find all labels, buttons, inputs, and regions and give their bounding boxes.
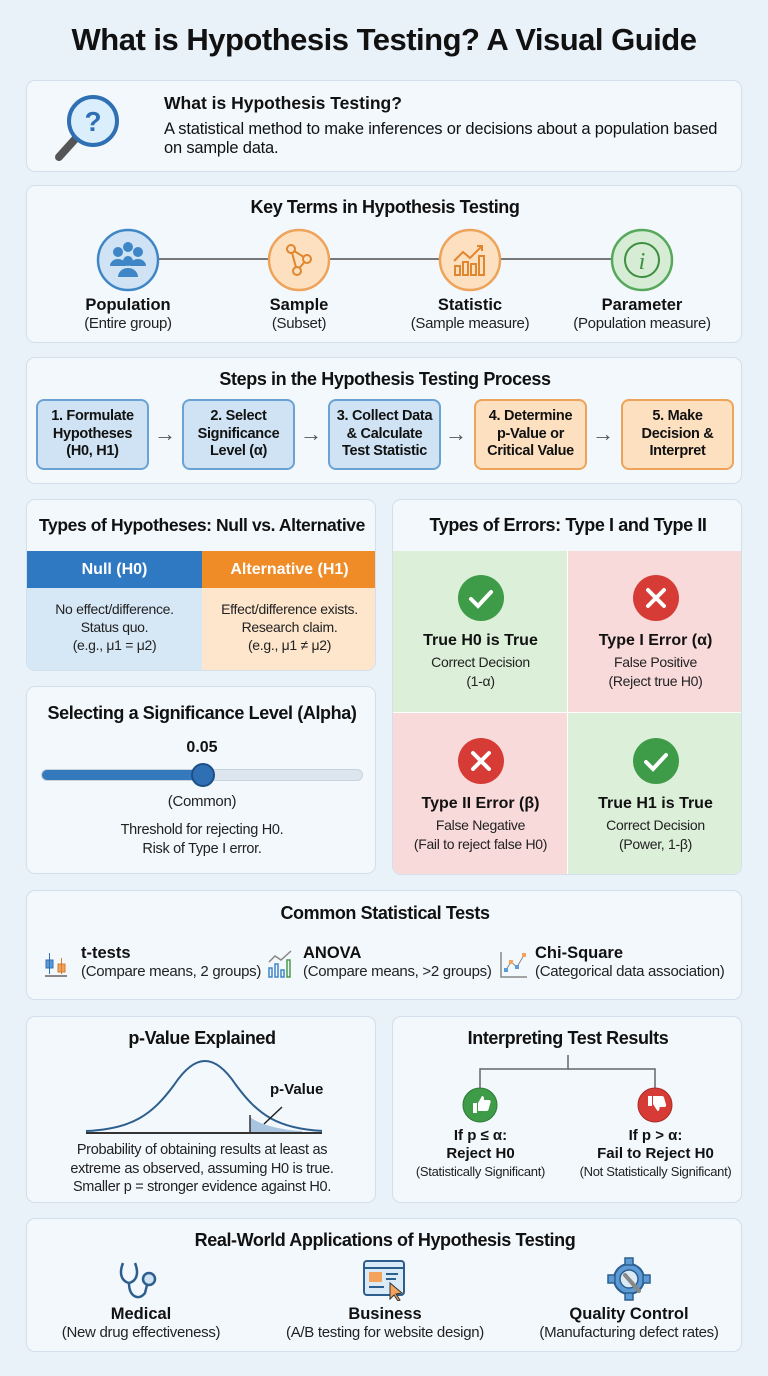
result: reject: Reject H0 [446,1145,515,1162]
cell: type I: Type I Error (α) [599,632,712,649]
icon: parameter: i [639,249,645,275]
label: population: Population [85,296,171,314]
icon: stethoscope [120,1262,156,1298]
step 2: 2. Select [210,408,267,424]
item: ANOVA [268,944,492,980]
result: reject: (Statistically Significant) [416,1164,545,1179]
cell: true H1 [568,713,743,876]
step 1: (H0, H1) [66,443,119,459]
step 4: p-Value or [497,426,564,442]
icon: magnifier: ? [84,106,102,137]
value label: 0.05 [186,739,218,756]
panel: hypotheses types [26,499,376,671]
label: medical: Medical [111,1305,171,1323]
icon: population [96,228,160,292]
panel: common tests [26,890,742,1000]
column: alternative: (e.g., μ1 ≠ μ2) [248,637,331,653]
column: null [27,551,202,672]
column: null: (e.g., μ1 = μ2) [73,637,156,653]
text: p-value explanation [70,1142,334,1195]
step 1: 1. Formulate [51,408,134,424]
chart: bell curve [86,1060,322,1134]
cell: type I [568,551,743,713]
step 3: 3. Collect Data [337,408,432,424]
label: population [84,296,172,332]
icon: sample [268,228,330,292]
step 4: 4. Determine [489,408,572,424]
heading: interpreting: Interpreting Test Results [468,1028,668,1048]
result: fail to reject: Fail to Reject H0 [597,1145,714,1162]
panel: key terms [26,185,742,343]
label: business: Business [348,1305,422,1323]
heading: key terms: Key Terms in Hypothesis Testing [250,197,520,217]
label: parameter: Parameter [602,296,682,314]
result: fail to reject: (Not Statistically Significant) [580,1164,731,1179]
connector line [127,258,642,260]
label: sample [270,296,328,332]
heading: alpha: Selecting a Significance Level (Alpha) [48,703,356,723]
column: alternative [202,551,377,672]
text: p-value explanation: Smaller p = stronger evidence against H0. [73,1179,331,1195]
description [120,822,283,857]
label: parameter [573,296,711,332]
step 2 [182,399,295,470]
cell: true H0: Correct Decision [431,654,530,670]
icon: thumbs up [462,1088,498,1122]
step 1: Hypotheses [53,426,132,442]
step 4 [474,399,587,470]
step 3: & Calculate [347,426,422,442]
item: t-tests [45,944,261,980]
heading: steps: Steps in the Hypothesis Testing Process [219,369,551,389]
cell: true H1: True H1 is True [598,795,713,812]
arrow 3: → [445,421,467,446]
label: sample: Sample [270,296,328,314]
text: p-value explanation: extreme as observed, assuming H0 is true. [70,1160,334,1176]
item: t-tests: (Compare means, 2 groups) [81,963,261,980]
item: t-tests: t-tests [81,944,131,962]
column: alternative: Effect/difference exists. [221,601,358,617]
panel: interpreting results [392,1016,742,1203]
label: medical: (New drug effectiveness) [62,1324,220,1341]
icon: parameter [610,228,674,292]
label: statistic: (Sample measure) [411,315,529,332]
column: alternative: Research claim. [242,619,337,635]
cell: true H1: Correct Decision [606,817,705,833]
item: ANOVA: (Compare means, >2 groups) [303,963,492,980]
column: null: Status quo. [81,619,148,635]
panel: significance level [26,686,376,874]
column: alternative: Alternative (H1) [230,561,349,578]
label: business: (A/B testing for website design) [286,1324,484,1341]
step 2: Level (α) [210,443,267,459]
icon: web page [363,1260,405,1301]
icon: gear wrench [607,1257,651,1301]
caption: (Common) [168,793,236,810]
description: Threshold for rejecting H0. [121,822,283,838]
label: business [286,1305,484,1341]
heading: hypotheses: Types of Hypotheses: Null vs. Alternative [39,515,365,535]
description: Risk of Type I error. [142,841,262,857]
panel: definition [26,80,742,172]
label: sample: (Subset) [272,315,326,332]
decision tree lines [479,1055,656,1088]
arrow 1: → [154,421,176,446]
panel: applications [26,1218,742,1352]
step 5: Interpret [649,443,706,459]
label: quality control: (Manufacturing defect rates) [539,1324,719,1341]
cell: true H0: (1-α) [466,673,495,689]
arrow 4: → [592,421,614,446]
panel: steps [26,357,742,484]
heading: tests: Common Statistical Tests [280,903,490,923]
item: Chi-Square: (Categorical data association) [535,963,724,980]
step 5 [621,399,734,470]
title: What is Hypothesis Testing? A Visual Guide [72,22,696,57]
step 3 [328,399,441,470]
heading: applications: Real-World Applications of Hypothesis Testing [195,1230,575,1250]
arrow 2: → [300,421,322,446]
cell: type II: Type II Error (β) [422,795,539,812]
cell: true H0 [393,551,568,713]
heading: definition: What is Hypothesis Testing? [164,93,402,113]
result: reject: If p ≤ α: [454,1127,507,1144]
cell: type I: (Reject true H0) [608,673,702,689]
panel: errors [392,499,742,875]
cell: true H0: True H0 is True [423,632,538,649]
result: fail to reject: If p > α: [629,1127,682,1144]
label: parameter: (Population measure) [573,315,711,332]
slider [41,769,363,781]
label: statistic: Statistic [438,296,502,314]
label: population: (Entire group) [84,315,172,332]
label: p-value: p-Value [270,1081,323,1098]
label: quality control [539,1305,719,1341]
item: ANOVA: ANOVA [303,944,361,962]
step 3: Test Statistic [342,443,427,459]
step 1 [36,399,149,470]
panel: p-value [26,1016,376,1203]
text: p-value explanation: Probability of obtaining results at least as [77,1142,327,1158]
cell: type II: False Negative [436,817,525,833]
step 4: Critical Value [487,443,574,459]
item: Chi-Square [500,944,724,980]
step 5: Decision & [642,426,713,442]
column: null: No effect/difference. [55,601,174,617]
label: medical [62,1305,220,1341]
label: quality control: Quality Control [569,1305,689,1323]
result: reject [416,1127,545,1179]
text: definition: A statistical method to make inferences or decisions about a population based on sample data. [164,120,717,157]
cell: type II [393,713,568,876]
icon: statistic [438,228,502,292]
step 2: Significance [198,426,279,442]
step 5: 5. Make [652,408,703,424]
label: statistic [411,296,529,332]
icon: magnifier [55,95,119,161]
heading: errors: Types of Errors: Type I and Type II [429,515,707,535]
heading: p-value: p-Value Explained [128,1028,276,1048]
result: fail to reject [580,1127,731,1179]
icon: thumbs down [638,1088,672,1122]
cell: type I: False Positive [614,654,697,670]
cell: type II: (Fail to reject false H0) [414,836,547,852]
cell: true H1: (Power, 1-β) [619,836,692,852]
item: Chi-Square: Chi-Square [535,944,623,962]
column: null: Null (H0) [82,561,147,578]
